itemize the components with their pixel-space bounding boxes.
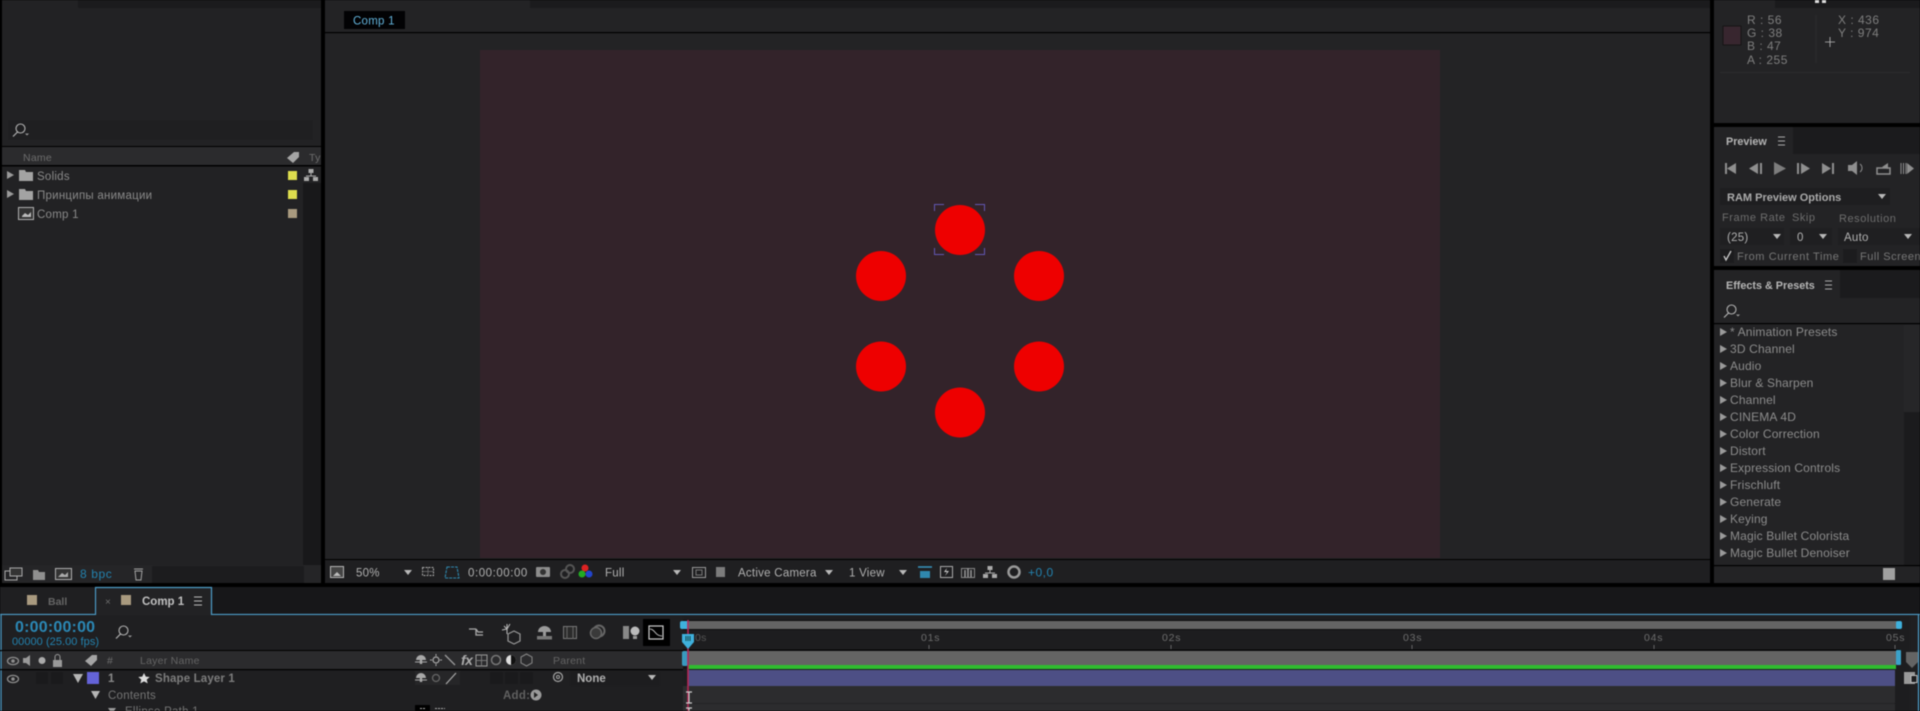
layer row: Shape Layer 1: Shape Layer 1	[155, 673, 235, 685]
panel: timeline	[0, 615, 1920, 711]
viewer toolbar: 1 View	[849, 568, 885, 580]
icon: crosshair	[1825, 37, 1835, 47]
green cached bar	[688, 665, 1896, 669]
tab: Preview	[1726, 136, 1785, 148]
tab: Comp 1 active: Comp 1	[142, 596, 185, 608]
panel: project	[2, 0, 321, 583]
rgba readout: G : 38	[1747, 26, 1783, 40]
item: animation principles folder	[7, 189, 297, 202]
viewer toolbar: 50%	[356, 568, 380, 580]
comp switches	[469, 619, 670, 646]
effects list: Color Correction	[1730, 427, 1820, 441]
ruler labels	[695, 632, 1905, 644]
effects list: Audio	[1730, 359, 1762, 373]
viewer toolbar: Full	[605, 568, 625, 580]
effects list: 3D Channel	[1730, 342, 1795, 356]
work area nav bar	[686, 621, 1897, 629]
current time indicator	[682, 620, 694, 711]
icon: project search	[13, 124, 29, 136]
layer header row: #	[107, 655, 113, 667]
layer header row	[0, 650, 683, 670]
xy readout: Y : 974	[1838, 26, 1879, 40]
tab: Ball	[0, 587, 94, 614]
viewer toolbar	[325, 559, 1710, 583]
tab: Ball: Ball	[48, 596, 67, 608]
icon: hierarchy	[304, 169, 318, 181]
column: parent: Parent	[553, 655, 585, 667]
ruler labels: 02s	[1162, 632, 1181, 644]
item: Solids	[7, 170, 297, 183]
item: Comp 1: Comp 1	[37, 209, 79, 221]
effects list: Magic Bullet Colorista	[1730, 529, 1850, 543]
ruler labels: 03s	[1403, 632, 1422, 644]
tab: Effects & Presets: Effects & Presets	[1726, 280, 1815, 292]
circle: lower right	[1014, 342, 1064, 392]
layer row: Shape Layer 1	[8, 671, 660, 686]
effects list: Channel	[1730, 393, 1776, 407]
icon: label tag	[287, 152, 299, 163]
rgba readout: B : 47	[1747, 39, 1781, 53]
item: animation principles folder: Принципы анимации	[37, 190, 152, 202]
effects list: Generate	[1730, 495, 1781, 509]
viewer toolbar: Active Camera	[738, 568, 817, 580]
ruler labels: 04s	[1644, 632, 1663, 644]
dropdown: RAM Preview Options: RAM Preview Options	[1727, 192, 1841, 204]
icon: end marker	[1906, 652, 1918, 668]
icon: timeline search	[116, 626, 132, 638]
column: Type: Ty	[309, 152, 321, 164]
ellipse path row	[108, 705, 445, 711]
label: skip: Skip	[1792, 212, 1816, 224]
effects list: Keying	[1730, 512, 1768, 526]
contents row: Contents	[108, 690, 156, 702]
rgba readout: R : 56	[1747, 13, 1782, 27]
ruler labels: 0s	[695, 632, 707, 644]
work area bar	[688, 651, 1896, 665]
contents row	[91, 690, 542, 702]
project toolbar: 8 bpc	[80, 567, 112, 581]
panel: composition viewer	[325, 0, 1710, 583]
tab: Comp 1 active: ×	[105, 597, 111, 608]
property rows	[683, 686, 1895, 711]
layer row: Shape Layer 1: 1	[108, 673, 115, 685]
xy readout: X : 436	[1838, 13, 1880, 27]
effects list: Frischluft	[1730, 478, 1781, 492]
parent value: None	[577, 673, 606, 685]
resolution value: Auto	[1844, 232, 1869, 244]
tab: Comp 1 active	[0, 588, 1920, 616]
rgba readout	[1747, 13, 1788, 67]
effects list: Expression Controls	[1730, 461, 1840, 475]
viewer toolbar: 0:00:00:00	[468, 568, 528, 580]
circle: upper right	[1014, 251, 1064, 301]
panel: effects and presets	[1714, 270, 1920, 583]
circle: top	[935, 205, 985, 255]
icon: comp button	[1904, 672, 1917, 684]
time ruler	[680, 616, 1918, 711]
panel: preview	[1714, 127, 1920, 266]
viewer toolbar: +0,0	[1028, 566, 1054, 580]
circle: upper left	[856, 251, 906, 301]
effects list	[1720, 325, 1850, 560]
switch: fx: fx	[461, 652, 474, 668]
checkbox: from current time: From Current Time	[1737, 251, 1840, 263]
project toolbar	[2, 565, 321, 583]
tab: Comp 1 breadcrumb: Comp 1	[353, 16, 395, 28]
frame counter: 00000 (25.00 fps)	[12, 636, 99, 648]
composition canvas	[480, 50, 1440, 558]
panel: info	[1714, 0, 1920, 123]
icon: new bin	[1883, 568, 1895, 580]
xy readout	[1838, 13, 1880, 40]
effects list: CINEMA 4D	[1730, 410, 1796, 424]
checkbox: full screen: Full Screen	[1860, 251, 1920, 263]
icon: effects search	[1724, 305, 1740, 318]
timeline tabs	[0, 587, 1920, 616]
label: resolution: Resolution	[1839, 213, 1896, 225]
ruler labels: 05s	[1886, 632, 1905, 644]
effects list: * Animation Presets	[1730, 325, 1838, 339]
effects list: Distort	[1730, 444, 1766, 458]
rgba readout: A : 255	[1747, 53, 1788, 67]
tab: Preview: Preview	[1726, 136, 1767, 148]
frame rate value: (25)	[1727, 232, 1748, 244]
column: Name: Name	[23, 152, 52, 164]
checkbox: full screen	[1843, 249, 1920, 263]
icon: text cursor	[686, 692, 692, 711]
selection bracket	[934, 204, 984, 254]
item: Comp 1	[18, 208, 297, 221]
item: Solids: Solids	[37, 171, 70, 183]
circle: lower left	[856, 342, 906, 392]
label: frame rate: Frame Rate	[1722, 212, 1786, 224]
skip value: 0	[1797, 232, 1804, 244]
contents row: Add:	[503, 690, 530, 702]
effects list: Magic Bullet Denoiser	[1730, 546, 1850, 560]
circle: bottom	[935, 388, 985, 438]
playback controls	[1725, 161, 1914, 175]
current time: 0:00:00:00	[15, 619, 95, 636]
layer duration bar	[688, 670, 1895, 686]
effects list: Blur & Sharpen	[1730, 376, 1813, 390]
ruler labels: 01s	[921, 632, 940, 644]
column: layer name: Layer Name	[140, 655, 200, 667]
tab: Comp 1 breadcrumb	[344, 11, 405, 29]
color swatch	[1723, 26, 1741, 45]
